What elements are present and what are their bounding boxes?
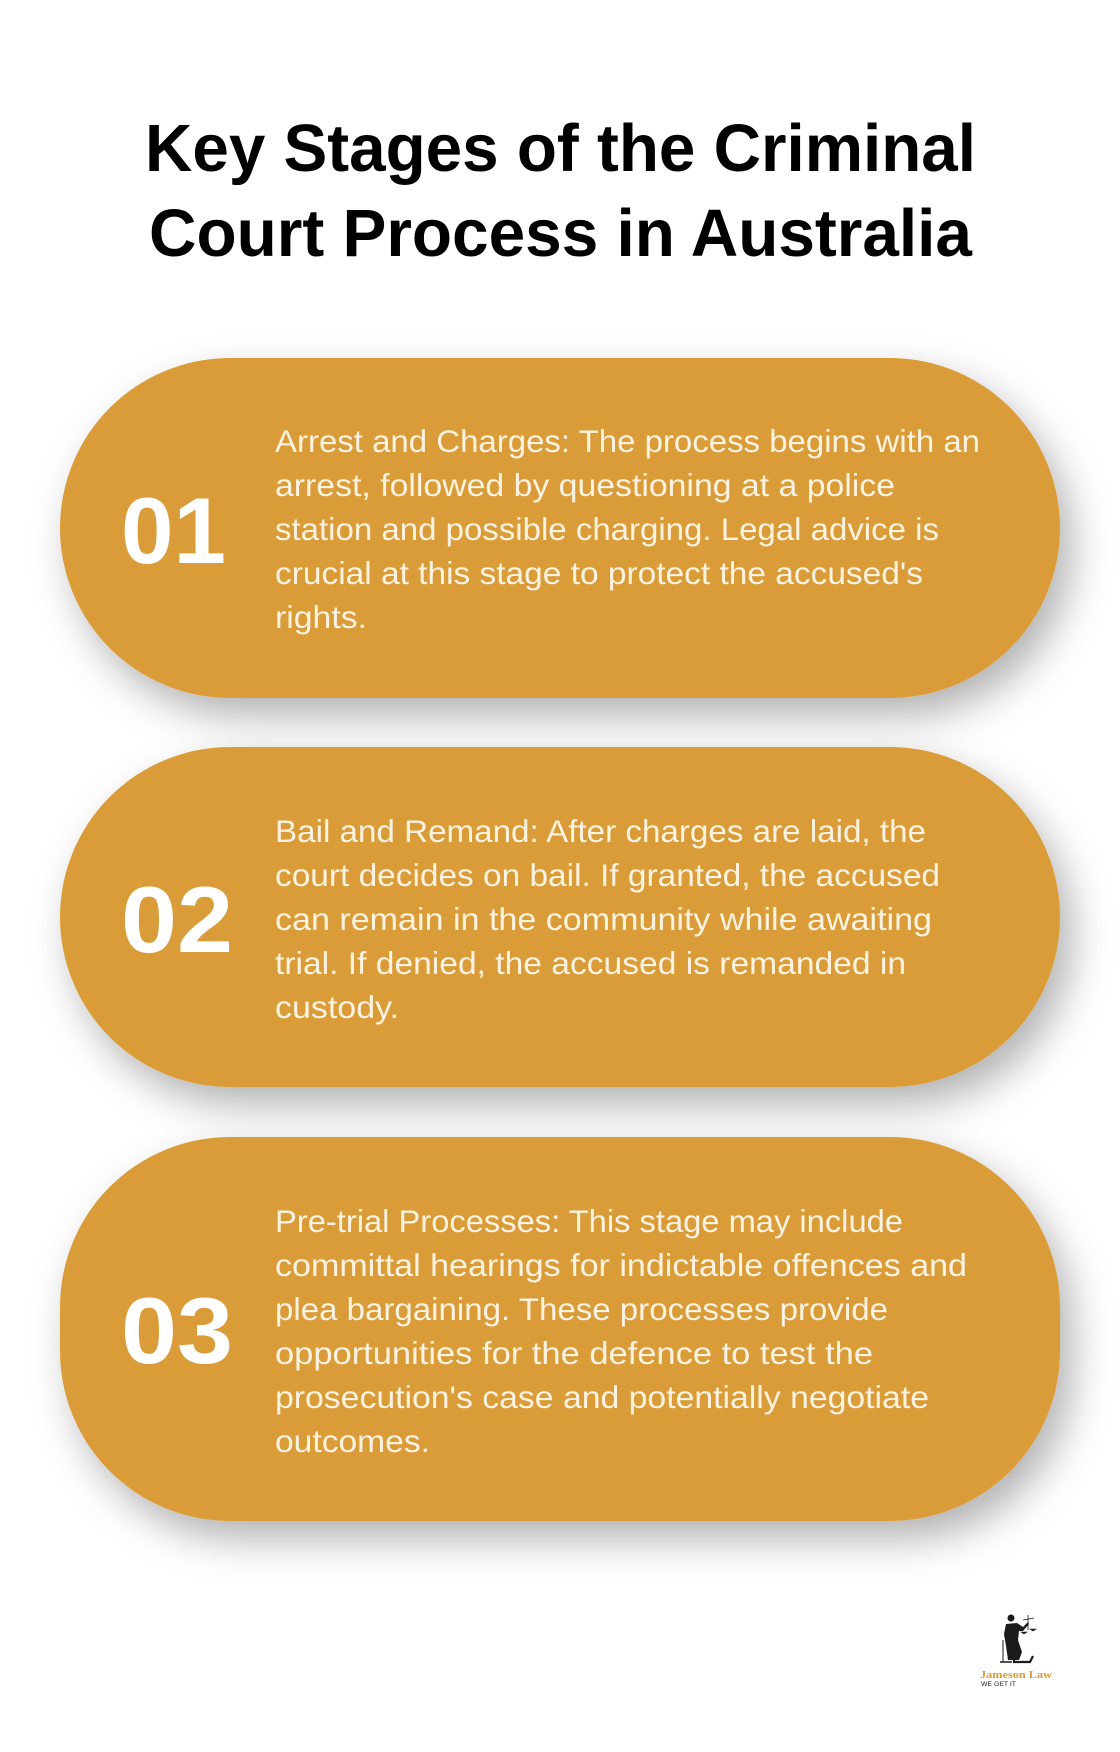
title: Key Stages of the Criminal [145,111,976,186]
title: Court Process in Australia [149,196,973,271]
text block 01: rights. [275,599,367,635]
pill background 01 [60,358,1060,698]
text block 02: Bail and Remand: After charges are laid, the [275,813,926,849]
logo: Jameson Law [980,1614,1052,1688]
logo tagline: WE GET IT [981,1681,1016,1688]
text block 01: station and possible charging. Legal advice is [275,511,939,547]
text block 03: prosecution's case and potentially negotiate [275,1379,929,1415]
pill background 02 [60,747,1060,1087]
text block 03: opportunities for the defence to test the [275,1335,873,1371]
text block 01: arrest, followed by questioning at a police [275,467,895,503]
title [145,111,976,271]
text block 03: plea bargaining. These processes provide [275,1291,888,1327]
number 03: 03 [121,1278,233,1383]
text block 03: Pre-trial Processes: This stage may include [275,1203,903,1239]
number 01: 01 [121,478,226,583]
logo name: Jameson Law [980,1670,1052,1681]
icon: lady justice with L [1000,1614,1036,1662]
text block 03: outcomes. [275,1423,430,1459]
number 02: 02 [121,867,233,972]
panel: stage 03 pre-trial processes [60,1137,1060,1521]
text block 03: committal hearings for indictable offences and [275,1247,967,1283]
pill background 03 [60,1137,1060,1521]
panel: stage 01 arrest and charges [60,358,1060,698]
text block 01 [275,423,980,635]
text block 01: crucial at this stage to protect the accused's [275,555,923,591]
text block 02: can remain in the community while awaiting [275,901,932,937]
text block 01: Arrest and Charges: The process begins with an [275,423,980,459]
panel: stage 02 bail and remand [60,747,1060,1087]
text block 03 [275,1203,967,1459]
text block 02: trial. If denied, the accused is remanded in [275,945,906,981]
text block 02: court decides on bail. If granted, the accused [275,857,940,893]
text block 02 [275,813,940,1025]
text block 02: custody. [275,989,399,1025]
